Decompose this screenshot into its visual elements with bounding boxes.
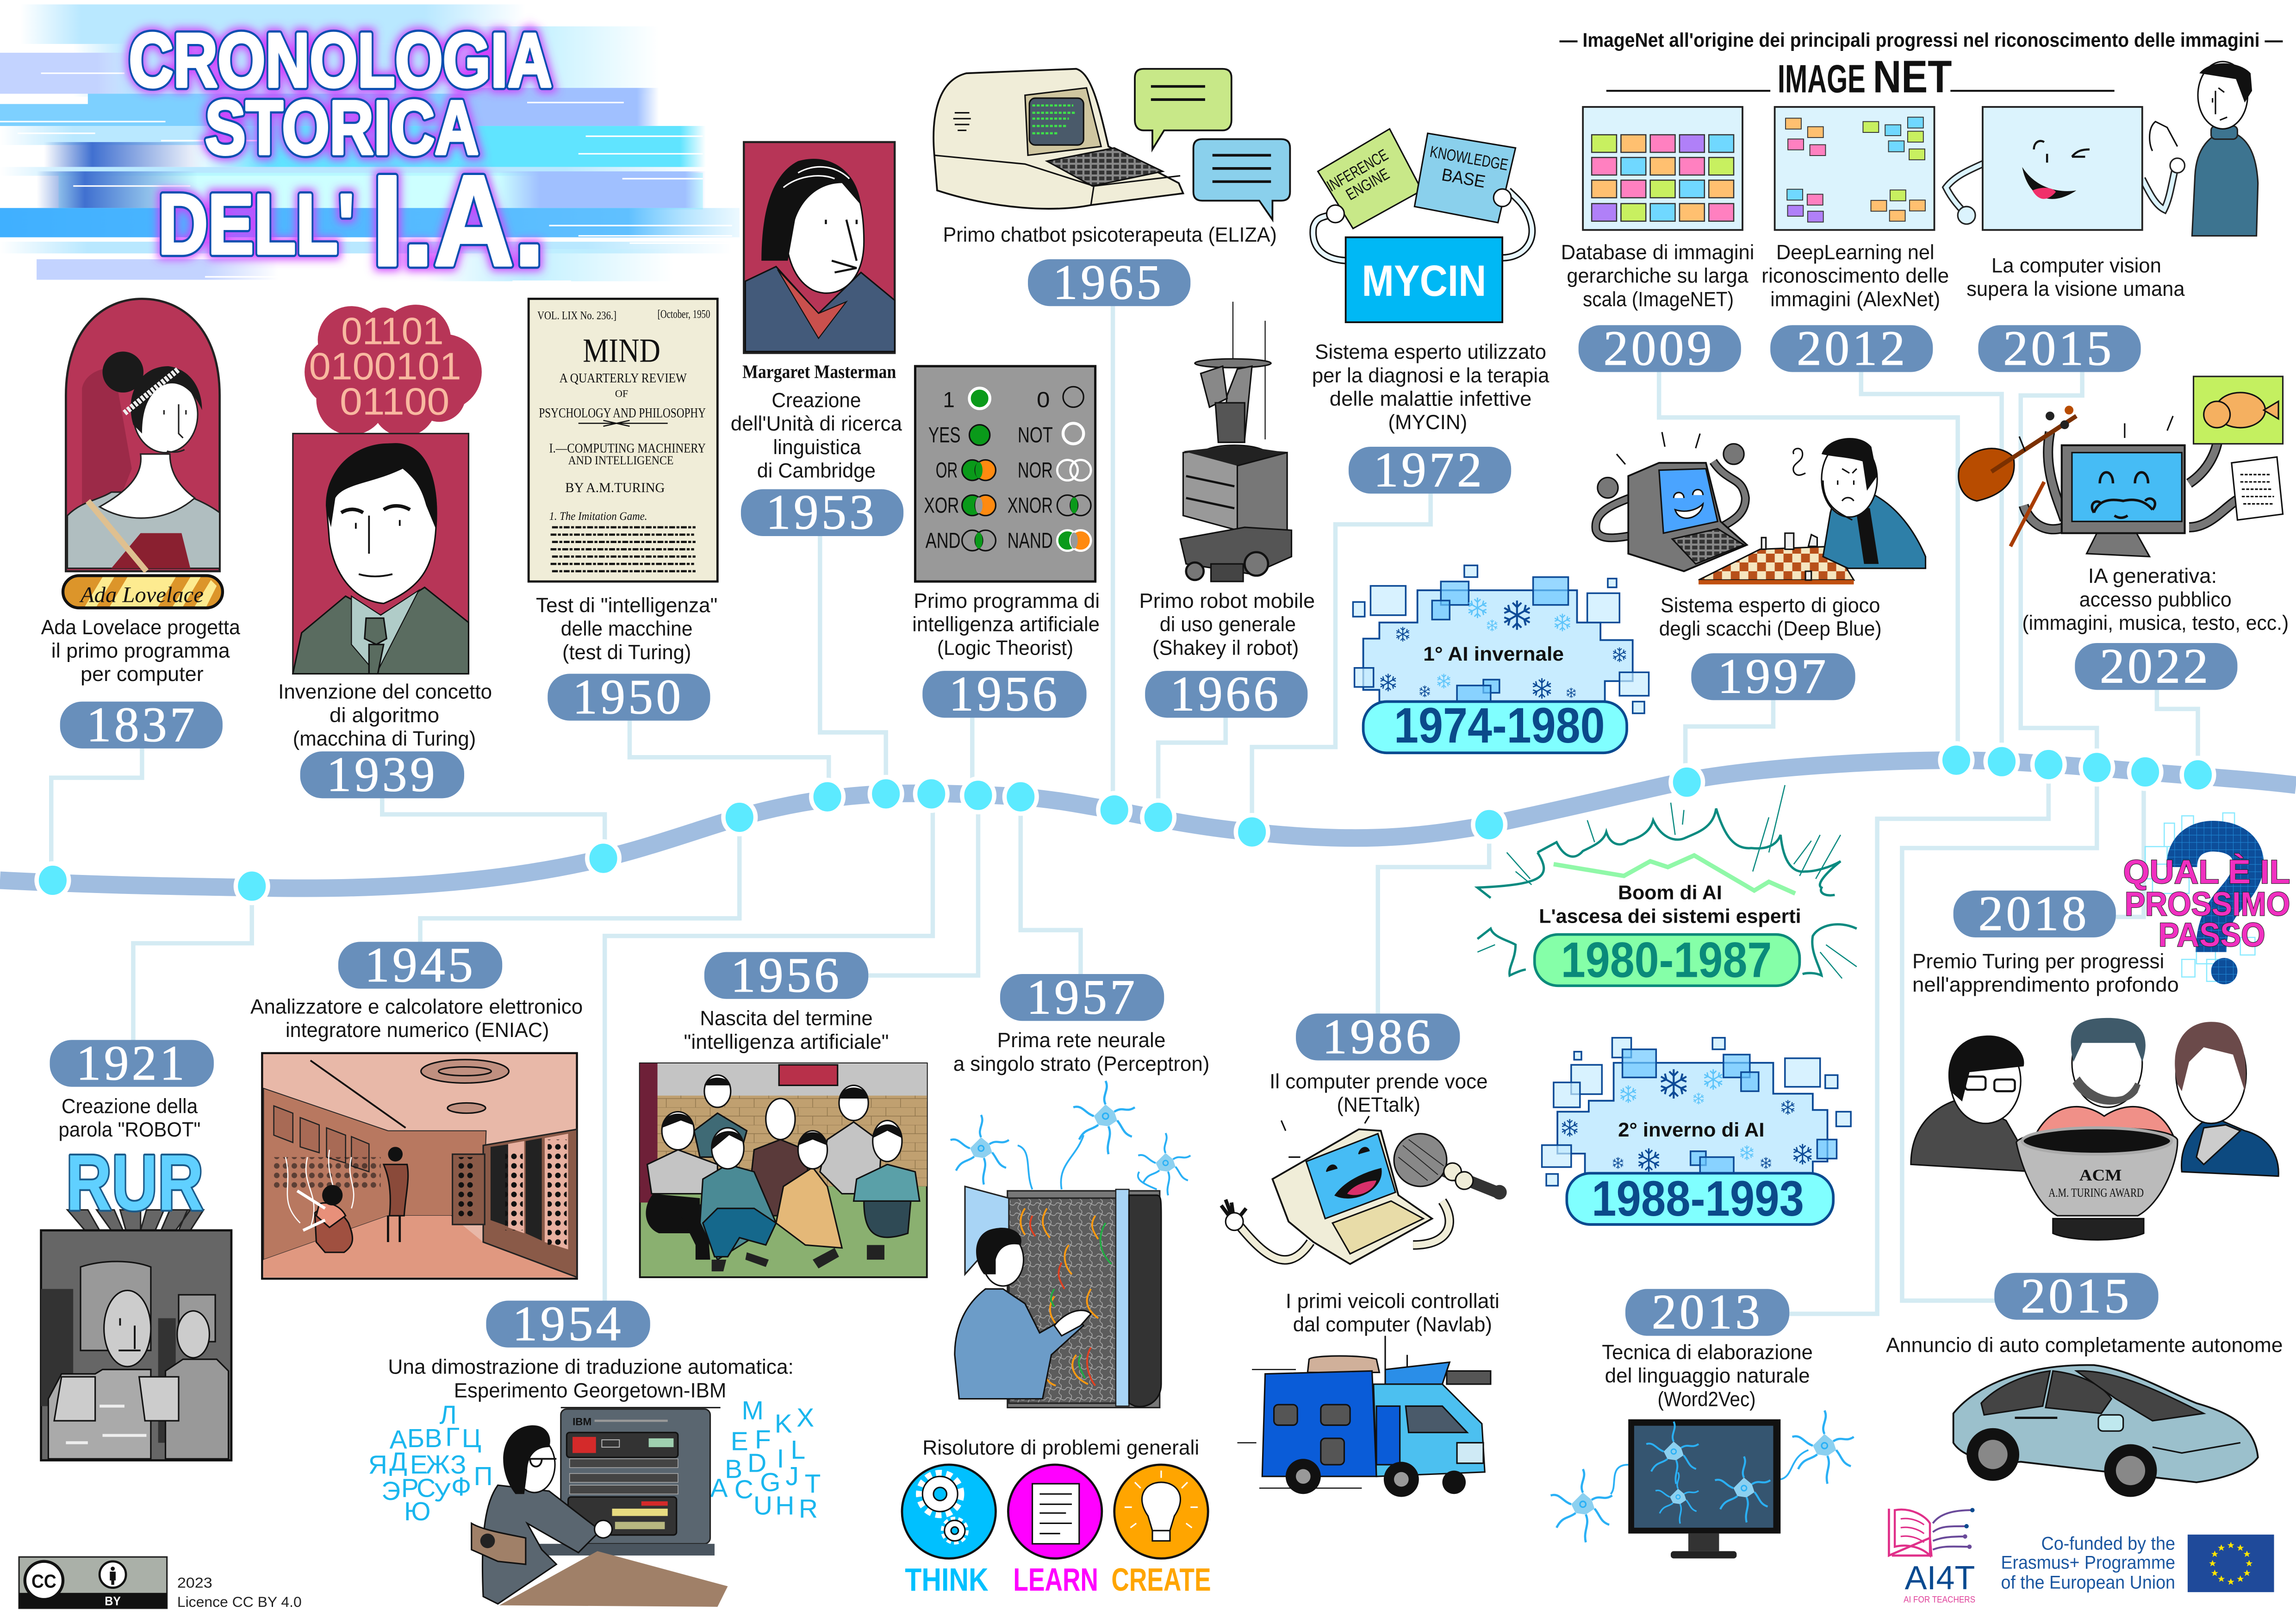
panel: generative AI monitor	[1959, 376, 2283, 556]
text: Perceptron: a singolo strato (Perceptron)	[953, 1053, 1209, 1075]
title: I.A.	[372, 149, 545, 293]
connector lines	[51, 306, 2198, 1314]
panel: Perceptron machine	[951, 1081, 1190, 1408]
icon: learn circle	[1008, 1465, 1102, 1558]
text: Shakey: di uso generale	[1160, 613, 1296, 636]
panel: Turing cloud with binary digits: 01100	[340, 381, 449, 423]
logo: AI4T: AI4T	[1905, 1559, 1975, 1597]
text: AlexNet	[1761, 241, 1949, 311]
text: Ada Lovelace: il primo programma	[51, 640, 230, 662]
text: Shakey: (Shakey il robot)	[1152, 637, 1299, 659]
pill: 1957	[1000, 969, 1164, 1024]
pill: 1957: 1957	[1027, 969, 1138, 1024]
panel: IBM computer and operator	[472, 1408, 728, 1607]
decoration: Cyrillic letters: Я	[368, 1450, 387, 1480]
timeline nodes	[37, 743, 2214, 903]
panel: computer vision winking square and man	[1946, 62, 2258, 236]
decoration: Latin letters: A	[710, 1474, 728, 1503]
text: Ada Lovelace	[41, 616, 240, 686]
pill: 1837	[60, 697, 223, 752]
labels: think learn create	[905, 1562, 1211, 1598]
decoration: Cyrillic letters: Ю	[404, 1497, 430, 1526]
icon: Creative Commons badge	[19, 1557, 167, 1608]
decoration: Latin letters: H	[775, 1491, 794, 1520]
text: Erasmus co-funding: Erasmus+ Programme	[2001, 1553, 2175, 1573]
pill: 2015 computer vision: 2015	[2003, 321, 2115, 376]
text: Word2Vec: Tecnica di elaborazione	[1602, 1341, 1813, 1364]
panel: Logic gate board: NOT	[1018, 423, 1053, 448]
text: license: Licence CC BY 4.0	[177, 1593, 302, 1610]
labels: think learn create: CREATE	[1111, 1562, 1211, 1598]
title: CRONOLOGIA	[129, 18, 552, 103]
text: MYCIN	[1312, 341, 1549, 434]
panel: MIND paper: OF	[615, 387, 628, 399]
pill: 2015 autonomous	[1994, 1268, 2159, 1324]
text: Turing test: (test di Turing)	[562, 641, 691, 664]
panel: RUR robots	[41, 1138, 231, 1460]
timeline band	[0, 760, 2296, 888]
panel: MIND paper: [October, 1950	[658, 308, 710, 321]
text: Ada Lovelace: per computer	[81, 663, 204, 686]
label: Ada Lovelace: Ada Lovelace	[79, 583, 204, 607]
icon: Creative Commons badge: CC	[31, 1571, 56, 1592]
text: Shakey	[1139, 590, 1315, 659]
text: Turing machine: Invenzione del concetto	[278, 681, 492, 703]
pill: 1956 logic theorist	[922, 667, 1087, 722]
decoration: Cyrillic letters: У	[434, 1478, 451, 1507]
text: Georgetown-IBM	[388, 1356, 794, 1402]
panel: MYCIN: BASE	[1440, 165, 1487, 192]
title: DELL'	[158, 176, 355, 271]
decoration: Latin letters: C	[734, 1475, 753, 1505]
panel: Dartmouth group photo	[640, 1063, 927, 1277]
text: term AI: "intelligenza artificiale"	[684, 1031, 889, 1053]
text: computer vision: supera la visione umana	[1966, 278, 2185, 300]
icon: create circle	[1114, 1465, 1208, 1558]
panel: ImageNet database grid	[1583, 107, 1742, 230]
pill: 1945: 1945	[365, 937, 476, 993]
text: MYCIN: per la diagnosi e la terapia	[1312, 364, 1549, 387]
decoration: Latin letters: J	[785, 1462, 799, 1491]
pill: 1950: 1950	[572, 669, 684, 725]
decoration: Latin letters: E	[731, 1426, 748, 1456]
text: Cambridge unit: di Cambridge	[757, 459, 876, 482]
pill: 1945	[338, 937, 502, 993]
logo: AI4T: AI FOR TEACHERS	[1904, 1595, 1975, 1605]
panel: Logic gate board: NOR	[1018, 458, 1053, 482]
pill: 1986: 1986	[1322, 1009, 1433, 1064]
decoration: Latin letters: U	[753, 1491, 772, 1520]
pill: 2018: 2018	[1978, 886, 2090, 941]
text: license	[177, 1574, 302, 1610]
text: AlexNet: riconoscimento delle	[1761, 265, 1949, 287]
text: ENIAC	[250, 995, 583, 1042]
text: Deep Blue: degli scacchi (Deep Blue)	[1659, 618, 1882, 640]
panel: MYCIN	[1313, 129, 1532, 322]
pill: 2009: 2009	[1603, 321, 1715, 376]
label: Margaret Masterman: Margaret Masterman	[742, 361, 896, 382]
panel: boom of AI burst: Boom di AI	[1618, 882, 1722, 904]
panel: Margaret Masterman portrait	[744, 142, 895, 353]
panel: Logic gate board: 0	[1037, 388, 1050, 412]
title: DELL'	[158, 176, 355, 271]
panel: Word2Vec monitor with neurons	[1551, 1411, 1854, 1558]
text: Word2Vec	[1602, 1341, 1813, 1411]
pill: 1954	[486, 1296, 650, 1351]
text: Turing test: delle macchine	[561, 618, 693, 640]
title: CRONOLOGIA	[129, 18, 552, 103]
text: Erasmus co-funding: of the European Union	[2001, 1572, 2175, 1593]
label: Ada Lovelace	[63, 575, 223, 608]
panel: second AI winter	[1542, 1038, 1851, 1226]
panel: MYCIN: KNOWLEDGE	[1429, 143, 1510, 174]
text: Cambridge unit: linguistica	[773, 436, 861, 459]
decoration: Latin letters: D	[747, 1449, 766, 1478]
text: NETtalk: (NETtalk)	[1337, 1093, 1420, 1116]
text: ImageNet: Database di immagini	[1561, 241, 1754, 264]
text: robot word: Creazione della	[62, 1095, 198, 1118]
text: computer vision	[1966, 254, 2185, 300]
pill: 1921	[50, 1036, 214, 1091]
text: term AI	[684, 1007, 889, 1053]
decoration: Latin letters: L	[790, 1435, 805, 1465]
pill: 2022	[2075, 638, 2237, 693]
text: Deep Blue	[1659, 594, 1882, 640]
pill: 1966: 1966	[1170, 667, 1281, 722]
pill: 2013: 2013	[1652, 1285, 1763, 1340]
panel: Turing cloud with binary digits: 0100101	[309, 345, 461, 387]
pill: 1956 term: 1956	[731, 948, 842, 1003]
panel: MYCIN: MYCIN	[1362, 256, 1486, 306]
text: Word2Vec: (Word2Vec)	[1658, 1388, 1756, 1411]
text: robot word	[59, 1095, 200, 1141]
title: STORICA	[205, 85, 479, 170]
panel: Logic gate board: XOR	[924, 493, 959, 518]
text: ImageNet: scala (ImageNET)	[1583, 288, 1734, 311]
panel: Turing award winners and trophy: A.M. TURING AWARD	[2048, 1186, 2144, 1199]
text: Cambridge unit	[731, 389, 902, 482]
logo: ImageNet: NET	[1873, 51, 1952, 102]
text: ENIAC: Analizzatore e calcolatore elettronico	[250, 995, 583, 1018]
decoration: Cyrillic letters: Э	[381, 1476, 400, 1506]
logo: ImageNet	[1606, 51, 2115, 102]
pill: 1966	[1145, 667, 1307, 722]
text: robot word: parola "ROBOT"	[59, 1118, 200, 1141]
panel: MIND paper: A QUARTERLY REVIEW	[560, 371, 687, 386]
pill: 2012: 2012	[1797, 321, 1908, 376]
panel: first AI winter	[1353, 565, 1649, 753]
icon: Creative Commons badge: BY	[105, 1594, 121, 1608]
text: ImageNet	[1561, 241, 1754, 311]
pill: 2009	[1579, 321, 1741, 376]
pill: 1939	[300, 747, 464, 802]
panel: Turing award winners and trophy	[1911, 1018, 2278, 1240]
pill: 1921: 1921	[76, 1036, 187, 1091]
panel: AlexNet clusters	[1775, 107, 1935, 230]
text: Turing award	[1912, 950, 2179, 996]
panel: Turing cloud with binary digits	[305, 305, 482, 437]
text: MYCIN: delle malattie infettive	[1330, 387, 1531, 410]
title: DELL'	[158, 176, 355, 271]
text: Cambridge unit: Creazione	[772, 389, 861, 412]
panel: Logic gate board: OR	[936, 458, 958, 482]
panel: MIND paper: I.—COMPUTING MACHINERY	[549, 442, 706, 456]
panel: Logic gate board	[915, 366, 1095, 581]
panel: second AI winter: 1988-1993	[1592, 1171, 1804, 1226]
panel: MYCIN: INFERENCE	[1324, 146, 1391, 195]
title: I.A.	[372, 149, 545, 293]
decoration: Latin letters: T	[805, 1469, 821, 1499]
pill: 1939: 1939	[327, 747, 438, 802]
pill: 1956 term	[704, 948, 868, 1003]
text: Turing machine: di algoritmo	[330, 704, 439, 727]
pill: 2012	[1770, 321, 1933, 376]
text: Turing award: Premio Turing per progressi	[1912, 950, 2164, 973]
pill: 1997	[1691, 649, 1855, 704]
decoration: Latin letters: X	[796, 1403, 814, 1433]
panel: Deep Blue chess	[1596, 432, 1926, 584]
decoration: Cyrillic letters: Ж	[426, 1450, 450, 1480]
panel: MIND paper: PSYCHOLOGY AND PHILOSOPHY	[539, 405, 706, 421]
pill: 1954: 1954	[512, 1296, 624, 1351]
pill: 1837: 1837	[87, 697, 198, 752]
text: Turing machine: (macchina di Turing)	[293, 727, 476, 750]
text: computer vision: La computer vision	[1991, 254, 2161, 277]
panel: first AI winter: 1974-1980	[1394, 698, 1605, 753]
panel: MYCIN: ENGINE	[1343, 165, 1393, 204]
decoration: Cyrillic letters: С	[417, 1474, 436, 1503]
decoration: Cyrillic letters: Б	[407, 1424, 424, 1453]
icon: think circle	[902, 1465, 996, 1558]
decoration: Latin letters: R	[799, 1494, 818, 1524]
panel: autonomous car	[1954, 1365, 2258, 1497]
text: Navlab: I primi veicoli controllati	[1286, 1290, 1500, 1312]
text: Navlab: dal computer (Navlab)	[1293, 1313, 1492, 1336]
decoration: Cyrillic letters: Е	[410, 1450, 428, 1480]
panel: second AI winter: 2° inverno di AI	[1618, 1119, 1765, 1141]
icon: speech bubbles	[1135, 69, 1290, 220]
text: ImageNet: gerarchiche su larga	[1567, 265, 1748, 287]
pill: 2013	[1625, 1285, 1789, 1340]
panel: MIND paper: VOL. LIX No. 236.]	[537, 309, 616, 322]
panel: Logic gate board: NAND	[1008, 528, 1053, 553]
text: generative AI: accesso pubblico	[2079, 588, 2232, 611]
text: ELIZA: Primo chatbot psicoterapeuta (ELIZA)	[943, 224, 1277, 246]
graphic: next step question mark: QUAL È IL	[2123, 853, 2290, 891]
text: Navlab	[1286, 1290, 1500, 1336]
decoration: Cyrillic letters: В	[425, 1424, 442, 1453]
text: term AI: Nascita del termine	[700, 1007, 873, 1030]
decoration: Cyrillic letters: Ф	[451, 1472, 471, 1501]
text: Turing award: nell'apprendimento profondo	[1912, 974, 2179, 996]
panel: Logic gate board: AND	[926, 528, 961, 553]
text: Word2Vec: del linguaggio naturale	[1605, 1365, 1810, 1387]
decoration: Cyrillic letters: Л	[439, 1400, 457, 1430]
title: STORICA	[205, 85, 479, 170]
text: Turing test: Test di "intelligenza"	[536, 594, 717, 617]
logo: ImageNet: IMAGE	[1778, 57, 1866, 101]
pill: 1950	[548, 669, 710, 725]
pill: 2018	[1954, 886, 2116, 941]
text: Logic Theorist: Primo programma di	[914, 590, 1100, 612]
text: AlexNet: immagini (AlexNet)	[1770, 288, 1940, 311]
panel: Shakey robot	[1180, 302, 1292, 581]
pill: 2015 autonomous: 2015	[2021, 1268, 2132, 1324]
pill: 1956 logic theorist: 1956	[949, 667, 1060, 722]
panel: MIND paper: AND INTELLIGENCE	[568, 453, 673, 467]
text: Shakey: Primo robot mobile	[1139, 590, 1315, 612]
title	[129, 18, 552, 293]
panel: MIND paper: BY A.M.TURING	[565, 480, 665, 495]
panel: IBM computer and operator: IBM	[572, 1416, 591, 1427]
decoration: Cyrillic letters: Г	[445, 1422, 460, 1452]
panel: boom of AI burst	[1477, 785, 1857, 987]
text: Logic Theorist: (Logic Theorist)	[937, 637, 1073, 659]
pill: 1965: 1965	[1053, 255, 1164, 310]
labels: think learn create: LEARN	[1013, 1562, 1098, 1598]
text: MYCIN: Sistema esperto utilizzato	[1315, 341, 1546, 363]
decoration: Latin letters	[710, 1396, 821, 1524]
title: I.A.	[372, 149, 545, 293]
text: Georgetown-IBM: Esperimento Georgetown-IBM	[454, 1379, 726, 1402]
decoration: Latin letters: G	[760, 1468, 780, 1497]
panel: MIND paper	[529, 299, 717, 581]
logo: AI4T	[1889, 1508, 1975, 1605]
decoration: Cyrillic letters: П	[474, 1462, 493, 1491]
text: Ada Lovelace: Ada Lovelace progetta	[41, 616, 240, 639]
text: generative AI	[2022, 565, 2289, 634]
panel: Navlab van	[1237, 1336, 1491, 1497]
text: Logic Theorist: intelligenza artificiale	[912, 613, 1100, 636]
decoration: Cyrillic letters	[368, 1400, 493, 1526]
pill: 2015 computer vision	[1978, 321, 2141, 376]
decoration: Cyrillic letters: Р	[401, 1474, 419, 1503]
panel: boom of AI burst: L'ascesa dei sistemi esperti	[1539, 905, 1801, 927]
graphic: next step question mark: PASSO	[2159, 916, 2265, 954]
text: AlexNet: DeepLearning nel	[1776, 241, 1935, 264]
decoration: Latin letters: K	[775, 1409, 792, 1438]
panel: Turing cloud with binary digits: 01101	[341, 311, 444, 353]
text: Turing machine	[278, 681, 492, 750]
text: Turing test	[536, 594, 717, 664]
text: autonomous car: Annuncio di auto completamente autonome	[1886, 1334, 2283, 1356]
text: generative AI: (immagini, musica, testo, ecc.)	[2022, 612, 2289, 634]
text: NETtalk: Il computer prende voce	[1269, 1070, 1488, 1093]
panel: MIND paper: 1. The Imitation Game.	[549, 510, 647, 523]
panel: Alan Turing portrait	[293, 434, 468, 674]
panel: RUR robots: RUR	[66, 1138, 204, 1227]
text: Cambridge unit: dell'Unità di ricerca	[731, 412, 902, 435]
pill: 1953	[741, 485, 903, 540]
text: generative AI: IA generativa:	[2088, 565, 2217, 587]
labels: think learn create: THINK	[905, 1562, 989, 1598]
decoration: Cyrillic letters: А	[390, 1425, 407, 1455]
decoration: Latin letters: B	[725, 1454, 742, 1484]
panel: Turing award winners and trophy: ACM	[2079, 1166, 2122, 1184]
decoration: Cyrillic letters: З	[450, 1450, 466, 1480]
title: STORICA	[205, 85, 479, 170]
title background streaks	[0, 5, 740, 281]
text: Erasmus co-funding	[2001, 1533, 2175, 1593]
text: Logic Theorist	[912, 590, 1100, 659]
pill: 1997: 1997	[1717, 649, 1829, 704]
text: Perceptron: Prima rete neurale	[997, 1029, 1165, 1052]
title: CRONOLOGIA	[129, 18, 552, 103]
text: general problem solver: Risolutore di problemi generali	[922, 1437, 1199, 1459]
text: Deep Blue: Sistema esperto di gioco	[1661, 594, 1880, 617]
panel: Logic gate board: XNOR	[1008, 493, 1053, 518]
panel: NETtalk singing computer	[1221, 1116, 1507, 1264]
pill: 1965	[1028, 255, 1190, 310]
text: MYCIN: (MYCIN)	[1388, 411, 1467, 434]
decoration: Latin letters: I	[777, 1444, 784, 1474]
decoration: Cyrillic letters: Д	[389, 1447, 407, 1477]
panel: ELIZA computer	[933, 69, 1183, 209]
panel: Logic gate board: 1	[943, 388, 955, 412]
pill: 2022: 2022	[2100, 638, 2211, 693]
pill: 1972	[1349, 442, 1511, 497]
panel: boom of AI burst: 1980-1987	[1561, 932, 1772, 987]
panel: ENIAC room	[262, 1053, 577, 1279]
decoration: Cyrillic letters: Ц	[462, 1424, 481, 1453]
text: ENIAC: integratore numerico (ENIAC)	[286, 1019, 549, 1042]
decoration: Latin letters: M	[742, 1396, 764, 1425]
graphic: next step question mark	[2123, 813, 2290, 984]
panel: first AI winter: 1° AI invernale	[1423, 643, 1564, 665]
icon: EU flag	[2188, 1535, 2274, 1592]
panel: Ada Lovelace portrait	[66, 299, 220, 571]
panel: MIND paper: MIND	[583, 331, 660, 369]
decoration: Latin letters: F	[755, 1425, 771, 1455]
text: license: 2023	[177, 1574, 212, 1591]
text: NETtalk	[1269, 1070, 1488, 1116]
text: Georgetown-IBM: Una dimostrazione di traduzione automatica:	[388, 1356, 794, 1379]
text: Erasmus co-funding: Co-funded by the	[2041, 1533, 2175, 1554]
panel: Logic gate board: YES	[928, 423, 961, 448]
text: Perceptron	[953, 1029, 1209, 1075]
pill: 1986	[1296, 1009, 1460, 1064]
pill: 1953: 1953	[766, 485, 877, 540]
pill: 1972: 1972	[1374, 442, 1485, 497]
